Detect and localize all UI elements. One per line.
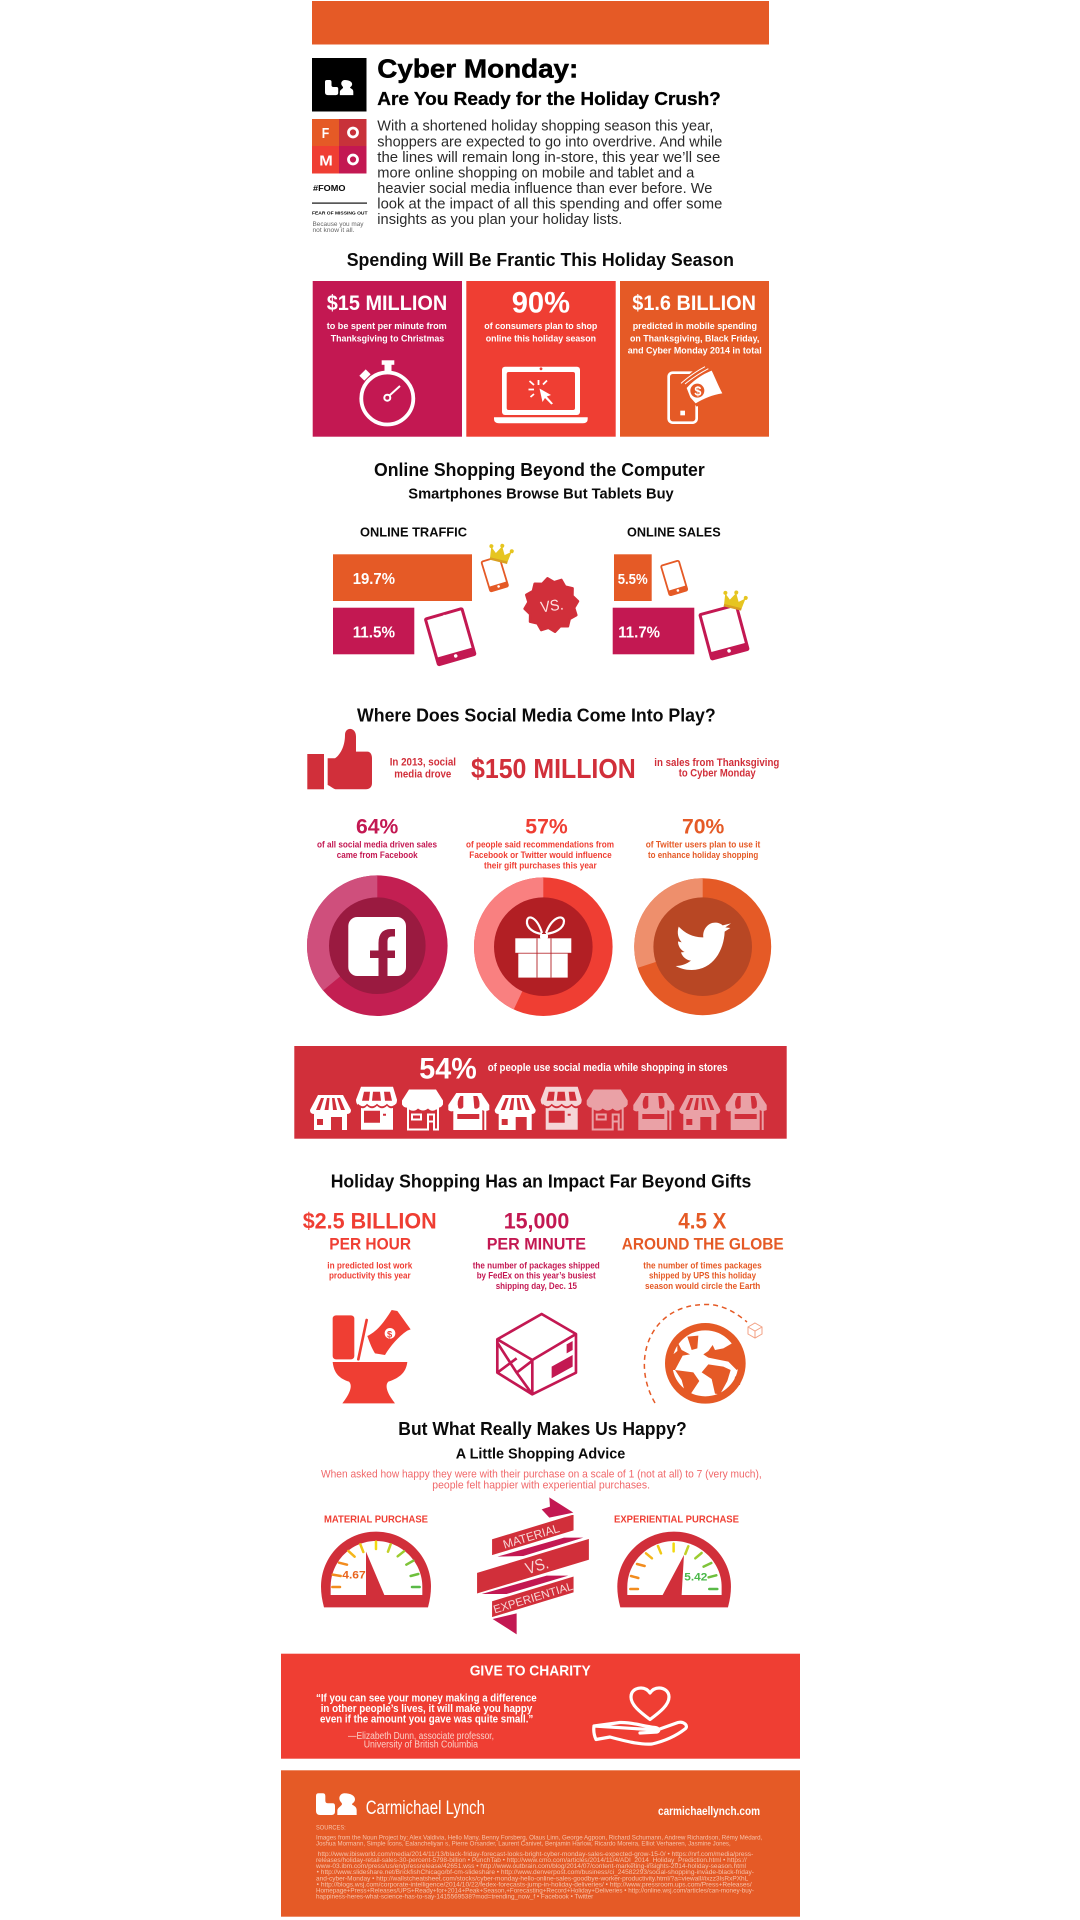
quote: even if the amount you gave was quite small.” xyxy=(320,1713,533,1725)
stat: 150 million: to Cyber Monday xyxy=(679,767,756,779)
stat: 57 percent recommendations xyxy=(466,815,614,1016)
pictogram: row of stores xyxy=(310,1087,767,1130)
gauge: experiential purchase xyxy=(614,1514,739,1607)
heading: happiness: But What Really Makes Us Happy? xyxy=(398,1418,687,1439)
agency logo square xyxy=(312,58,366,112)
intro paragraph: insights as you plan your holiday lists. xyxy=(377,211,622,228)
heading: online shopping xyxy=(374,459,705,503)
survey description: people felt happier with experiential purchases. xyxy=(432,1479,650,1491)
icon: globe with dashed orbit xyxy=(644,1304,762,1404)
ribbon: material vs experiential: EXPERIENTIAL xyxy=(492,1581,575,1616)
sources: Joshua Mormann, Simple Icons, Ealancheliyan s, Pierre Orsander, Laurent Canivet, Benjamin Harlow, Ricardo Moreira, Elliot Verhaeren, Jasmine Jones, xyxy=(316,1842,731,1848)
quote: University of British Columbia xyxy=(364,1740,478,1751)
stat: 64 percent facebook: 64% xyxy=(356,815,399,838)
sources: Images from the Noun Project by: Alex Valdivia, Hello Many, Benny Forsberg, Olaus Linn, George Agpoon, Richard Schumann, Andrew Richardson, Rémy Médard, xyxy=(316,1836,763,1842)
stat: 70 percent twitter: to enhance holiday shopping xyxy=(648,850,758,861)
stat: fedex packages: shipping day, Dec. 15 xyxy=(496,1281,578,1292)
panel: 90 percent: online this holiday season xyxy=(486,334,596,345)
panel: 15 million: to be spent per minute from xyxy=(327,321,447,332)
stat: 70 percent twitter: 70% xyxy=(682,815,725,838)
intro paragraph: more online shopping on mobile and tablet and a xyxy=(377,164,695,181)
chart: online traffic: 19.7% xyxy=(353,571,395,588)
panel: 15 million xyxy=(313,281,462,437)
panel: footer xyxy=(281,1770,800,1917)
donut chart: gift xyxy=(474,877,613,1016)
survey description xyxy=(321,1469,762,1491)
gauge: material purchase: MATERIAL PURCHASE xyxy=(324,1514,428,1526)
panel: 1.6 billion: and Cyber Monday 2014 in total xyxy=(628,346,762,357)
ribbon: material vs experiential: MATERIAL xyxy=(501,1521,561,1552)
ribbon: material vs experiential xyxy=(477,1497,589,1634)
sources: http://www.ibisworld.com/media/2014/11/13/black-friday-forecast-looks-bright-cyber-monday-sales-expected-grow-15-0/ • https://nrf.com/media/press- xyxy=(318,1852,753,1858)
sources: happiness-heres-what-science-has-to-say-1415569538?mod=trending_now_f • Facebook • Twitter xyxy=(316,1894,593,1900)
sources: and-cyber-Monday • http://wallstcheatsheet.com/stocks/cyber-monday-hello-online-sales-goodbye-worker-productivity.html/?a=viewall#ixzz3lsRxPXhL xyxy=(316,1876,749,1882)
FOMO tile logo xyxy=(312,119,366,174)
icon: stopwatch xyxy=(359,360,413,424)
gauge: experiential purchase: 5.42 xyxy=(684,1572,707,1584)
stat: 150 million: media drove xyxy=(394,768,451,780)
stat: ups around the globe: season would circle the Earth xyxy=(645,1281,760,1292)
sources: • http://blogs.wsj.com/corporate-intelligence/2014/10/22/fedex-forecasts-jump-in-holiday-deliveries/ • http://www.pressroom.ups.com/Press+Releases/ xyxy=(317,1882,752,1888)
stat: fedex packages: by FedEx on this year’s busiest xyxy=(477,1271,596,1282)
title: Cyber Monday: xyxy=(377,54,578,84)
gauge: experiential purchase: EXPERIENTIAL PURCHASE xyxy=(614,1514,739,1526)
website: carmichaellynch.com xyxy=(658,1806,760,1818)
quote xyxy=(316,1693,537,1751)
stat: 150 million: in sales from Thanksgiving xyxy=(654,757,779,769)
quote: “If you can see your money making a difference xyxy=(316,1693,537,1705)
intro paragraph: look at the impact of all this spending and offer some xyxy=(377,195,722,212)
stat: 57 percent recommendations: Facebook or Twitter would influence xyxy=(469,850,612,861)
donut chart: twitter xyxy=(634,878,771,1015)
panel: 15 million: Thanksgiving to Christmas xyxy=(331,334,444,345)
sources: SOURCES: xyxy=(316,1825,346,1831)
panel: 90 percent: of consumers plan to shop xyxy=(484,321,597,332)
heading: happiness: A Little Shopping Advice xyxy=(456,1447,625,1463)
stat: 57 percent recommendations: 57% xyxy=(525,815,568,838)
vs badge xyxy=(521,575,582,635)
quote: —Elizabeth Dunn, associate professor, xyxy=(348,1731,494,1742)
heading: social media: Where Does Social Media Come Into Play? xyxy=(357,705,716,726)
stat: 70 percent twitter xyxy=(634,815,771,1015)
stat: fedex packages: the number of packages shipped xyxy=(473,1260,600,1271)
panel: give to charity xyxy=(281,1654,800,1759)
stat: 150 million: In 2013, social xyxy=(390,756,456,768)
icon: toilet with money: $ xyxy=(387,1329,393,1339)
heading: online shopping: Online Shopping Beyond the Computer xyxy=(374,459,705,480)
gauge: material purchase xyxy=(321,1514,431,1607)
chart: online traffic: 11.5% xyxy=(353,624,395,641)
stat: ups around the globe: the number of times packages xyxy=(643,1260,762,1271)
stat: lost productivity: PER HOUR xyxy=(329,1234,411,1253)
icon: tablet xyxy=(425,609,475,665)
heading: spending: Spending Will Be Frantic This Holiday Season xyxy=(347,249,734,270)
sources xyxy=(315,1825,763,1900)
panel: in-store social media band xyxy=(294,1046,787,1139)
icon: phone with crown xyxy=(481,541,515,592)
panel: 1.6 billion xyxy=(620,281,769,437)
FOMO caption: Because you may xyxy=(312,222,364,228)
icon: thumbs up xyxy=(307,729,372,789)
chart: online sales: ONLINE SALES xyxy=(627,524,721,539)
stat: 150 million: $150 MILLION xyxy=(471,753,636,784)
sources: Homepage+Press+Releases/UPS+Ready+for+2014+Peak+Season,+Forecasting+Record+Holiday+Deliveries • http://online.wsj.com/articles/can-money-buy- xyxy=(316,1888,754,1894)
chart: online sales xyxy=(613,524,749,659)
panel: in-store social media band: of people use social media while shopping in stores xyxy=(488,1062,728,1074)
icon: phone with cash xyxy=(669,367,723,423)
stat: fedex packages: PER MINUTE xyxy=(487,1234,586,1253)
panel: 15 million: $15 MILLION xyxy=(327,292,447,315)
stat: lost productivity: in predicted lost work xyxy=(327,1260,413,1271)
vs badge: VS. xyxy=(539,596,565,616)
stat: 57 percent recommendations: of people said recommendations from xyxy=(466,840,614,851)
stat: 150 million xyxy=(390,753,779,784)
icon: hand holding heart xyxy=(594,1688,686,1744)
intro paragraph: the lines will remain long in-store, this year we’ll see xyxy=(377,149,720,166)
heading: happiness xyxy=(398,1418,687,1463)
icon: tablet with crown xyxy=(700,588,749,659)
sources: www-03.ibm.com/press/us/en/pressrelease/42651.wss • http://www.outbrain.com/blog/2014/07/content-marketing-insights-2014-holiday-season.html xyxy=(315,1864,746,1870)
sources: releases/holiday-retail-sales-30-percent-5798-billion • PunchTab • http://www.cmo.com/articles/2014/11/4/ADI_2014_Holiday_Prediction.html • https:// xyxy=(316,1858,747,1864)
FOMO caption: #FOMO xyxy=(313,184,346,193)
chart: online traffic xyxy=(333,524,515,665)
panel: 1.6 billion: on Thanksgiving, Black Friday, xyxy=(630,334,759,345)
icon: toilet with money xyxy=(333,1310,411,1403)
FOMO caption: not know it all. xyxy=(312,228,355,234)
stat: ups around the globe xyxy=(622,1208,784,1404)
stat: 57 percent recommendations: their gift purchases this year xyxy=(484,860,597,871)
intro paragraph: heavier social media influence than ever before. We xyxy=(377,180,712,197)
title: Are You Ready for the Holiday Crush? xyxy=(377,88,721,109)
intro paragraph xyxy=(377,118,722,228)
agency logo xyxy=(316,1793,485,1819)
stat: ups around the globe: 4.5 X xyxy=(678,1208,727,1233)
stat: 64 percent facebook: of all social media driven sales xyxy=(317,840,437,851)
stat: lost productivity xyxy=(303,1208,437,1403)
FOMO caption xyxy=(312,184,368,234)
intro paragraph: With a shortened holiday shopping season this year, xyxy=(377,118,713,135)
panel: 1.6 billion: predicted in mobile spending xyxy=(633,321,757,332)
agency logo: Carmichael Lynch xyxy=(366,1798,485,1819)
FOMO caption: FEAR OF MISSING OUT xyxy=(312,211,368,216)
chart: online sales: 5.5% xyxy=(618,571,648,588)
ribbon: material vs experiential: VS. xyxy=(523,1553,551,1578)
panel: in-store social media band: 54% xyxy=(419,1052,477,1085)
quote: in other people’s lives, it will make you happy xyxy=(321,1703,533,1715)
stat: ups around the globe: AROUND THE GLOBE xyxy=(622,1234,784,1253)
panel: 90 percent xyxy=(466,281,616,437)
top banner xyxy=(312,1,769,44)
heading: online shopping: Smartphones Browse But Tablets Buy xyxy=(408,487,674,503)
stat: lost productivity: $2.5 BILLION xyxy=(303,1208,437,1233)
stat: 64 percent facebook: came from Facebook xyxy=(337,850,418,861)
donut chart: facebook xyxy=(307,875,448,1016)
heading: impact: Holiday Shopping Has an Impact Far Beyond Gifts xyxy=(331,1170,751,1191)
stat: 64 percent facebook xyxy=(307,815,448,1016)
chart: online sales: 11.7% xyxy=(618,624,660,641)
icon: phone with cash: $ xyxy=(694,384,701,398)
intro paragraph: shoppers are expected to go into overdrive. And while xyxy=(377,133,722,150)
survey description: When asked how happy they were with their purchase on a scale of 1 (not at all) to 7 (very much), xyxy=(321,1469,762,1481)
title xyxy=(377,54,721,109)
stat: 70 percent twitter: of Twitter users plan to use it xyxy=(646,840,761,851)
stat: fedex packages xyxy=(473,1208,600,1394)
gauge: material purchase: 4.67 xyxy=(342,1570,366,1582)
FOMO tile logo: F xyxy=(322,125,329,142)
stat: fedex packages: 15,000 xyxy=(504,1208,569,1233)
stat: ups around the globe: shipped by UPS this holiday xyxy=(649,1271,757,1282)
icon: phone xyxy=(661,560,688,596)
sources: • http://www.slideshare.net/BrickfishChicago/bf-cm-slideshare • http://www.denverpost.com/business/ci_24582293/social-shopping-invade-black-friday- xyxy=(317,1870,754,1876)
panel: 90 percent: 90% xyxy=(512,287,570,320)
stat: lost productivity: productivity this year xyxy=(329,1271,411,1282)
icon: parcel xyxy=(497,1314,576,1394)
FOMO tile logo: M xyxy=(319,152,333,170)
chart: online traffic: ONLINE TRAFFIC xyxy=(360,524,468,539)
panel: give to charity: GIVE TO CHARITY xyxy=(470,1663,591,1680)
panel: 1.6 billion: $1.6 BILLION xyxy=(632,292,756,315)
icon: laptop with cursor xyxy=(494,367,588,423)
